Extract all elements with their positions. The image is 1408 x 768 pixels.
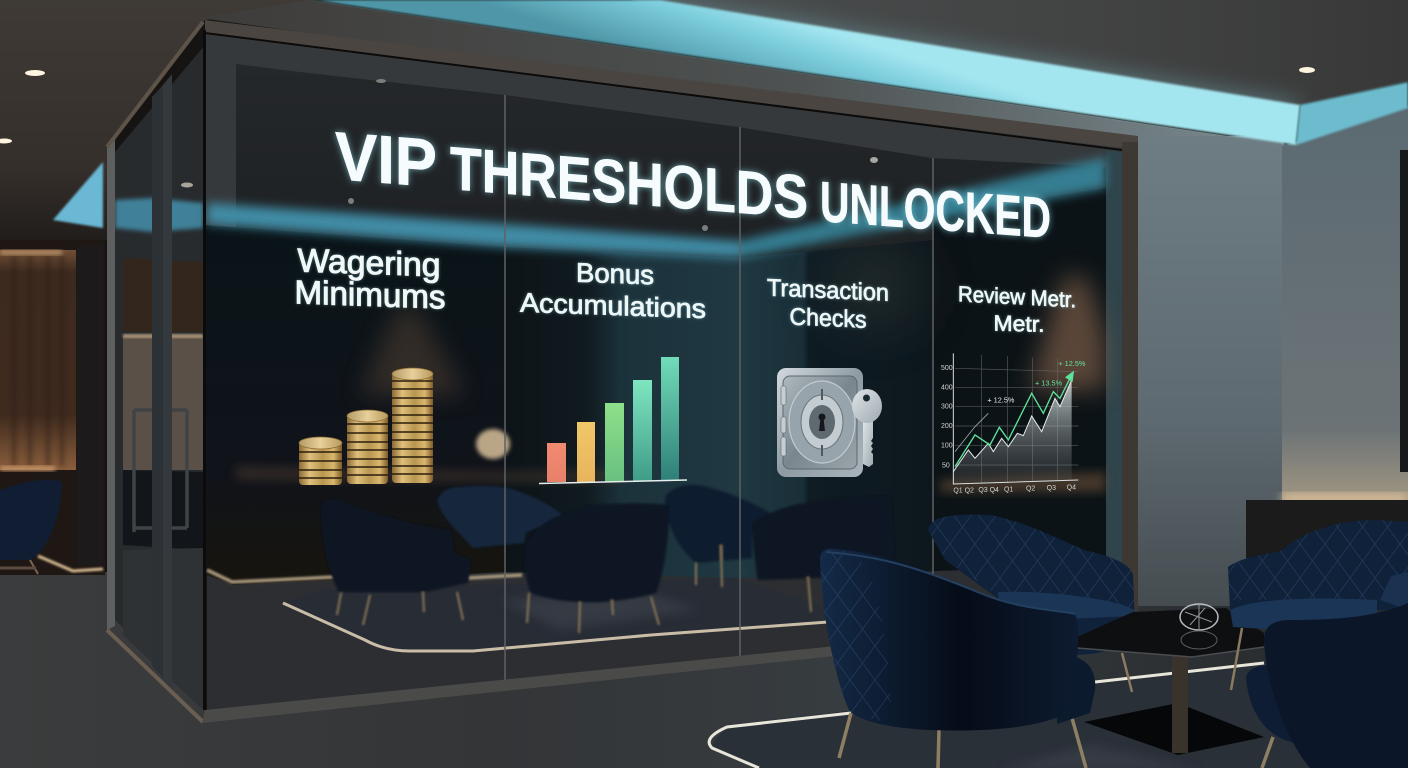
reflected spotlights	[348, 79, 878, 231]
line chart: upward trend: 200	[941, 423, 953, 430]
reflected armchairs	[321, 485, 895, 633]
line chart: upward trend: Q2	[1026, 486, 1035, 493]
line chart: upward trend: Q3	[1047, 485, 1056, 492]
right wall details: console and glow	[1246, 150, 1408, 558]
warm reflected wall glow	[236, 240, 1106, 492]
reflected teal ceiling band	[207, 157, 1106, 258]
bar chart: rising coloured bars	[539, 357, 687, 484]
heading: transaction checks: Transaction	[767, 274, 889, 307]
right wall column	[1138, 136, 1284, 606]
title: VIP	[335, 118, 437, 202]
background armchair left	[0, 480, 62, 574]
armchair: foreground center	[820, 549, 1095, 768]
line chart: upward trend: Q4	[1067, 484, 1076, 491]
door frames	[107, 22, 203, 722]
side door panes	[115, 45, 205, 710]
heading: wagering minimums	[295, 241, 446, 316]
icon: steel safe with key	[777, 368, 882, 477]
cove light band	[314, 0, 1408, 145]
glass vertical seams	[505, 95, 933, 682]
teal ceiling cove in background	[53, 162, 103, 228]
column 2: bonus accumulations	[520, 258, 706, 484]
heading: bonus accumulations: Accumulations	[520, 288, 706, 324]
heading: review metrics	[958, 281, 1076, 337]
line chart: upward trend: 100	[941, 443, 953, 450]
line chart: upward trend: 300	[941, 404, 953, 411]
upper right ceiling	[630, 0, 1408, 106]
reflected floor and rug	[207, 565, 1106, 710]
armchair: right rear	[1228, 520, 1408, 690]
left ceiling	[0, 0, 320, 240]
ceiling spotlight	[0, 138, 12, 144]
heading: wagering minimums: Minimums	[295, 273, 446, 316]
armchair: rear center	[928, 515, 1135, 692]
coffee table with crystal ornament	[1077, 604, 1264, 755]
ceiling spotlight	[1299, 67, 1315, 73]
column 1: wagering minimums	[295, 241, 446, 485]
heading: bonus accumulations: Bonus	[576, 258, 654, 290]
heading: bonus accumulations	[520, 258, 706, 324]
glass wall frame	[202, 20, 1138, 723]
line chart: upward trend: + 13.5%	[1035, 379, 1063, 388]
heading: review metrics: Review Metr.	[958, 281, 1076, 312]
floor light line	[38, 556, 103, 571]
line chart: upward trend: 500	[941, 365, 953, 372]
ceiling spotlight	[25, 70, 45, 76]
line chart: upward trend: Q3 Q4	[978, 487, 999, 494]
rug	[709, 663, 1408, 768]
left wood wall	[0, 240, 105, 575]
heading: wagering minimums: Wagering	[298, 241, 441, 283]
line chart: upward trend: + 12.5%	[987, 395, 1015, 404]
title: UNLOCKED	[820, 170, 1051, 251]
icon: gold coin stacks	[299, 368, 433, 485]
far right wall	[1282, 106, 1408, 510]
line chart: upward trend: Q1	[1004, 486, 1013, 493]
armchair: right foreground	[1246, 603, 1408, 768]
heading: transaction checks	[767, 274, 889, 334]
floor	[0, 572, 1408, 768]
glass wall panel	[205, 32, 1122, 710]
heading: transaction checks: Checks	[790, 303, 867, 334]
line chart: upward trend: 50	[942, 463, 950, 470]
column 4: review metrics	[941, 281, 1086, 495]
column 3: transaction checks	[767, 274, 889, 477]
door handle	[134, 410, 187, 532]
line chart: upward trend: Q1 Q2	[953, 488, 974, 495]
title	[335, 118, 1051, 251]
title: THRESHOLDS	[450, 134, 808, 231]
line chart: upward trend: + 12.5%	[1058, 359, 1086, 368]
gray soffit above the glass	[200, 0, 1295, 148]
heading: review metrics: Metr.	[993, 311, 1044, 337]
line chart: upward trend	[941, 353, 1086, 495]
line chart: upward trend: 400	[941, 384, 953, 391]
